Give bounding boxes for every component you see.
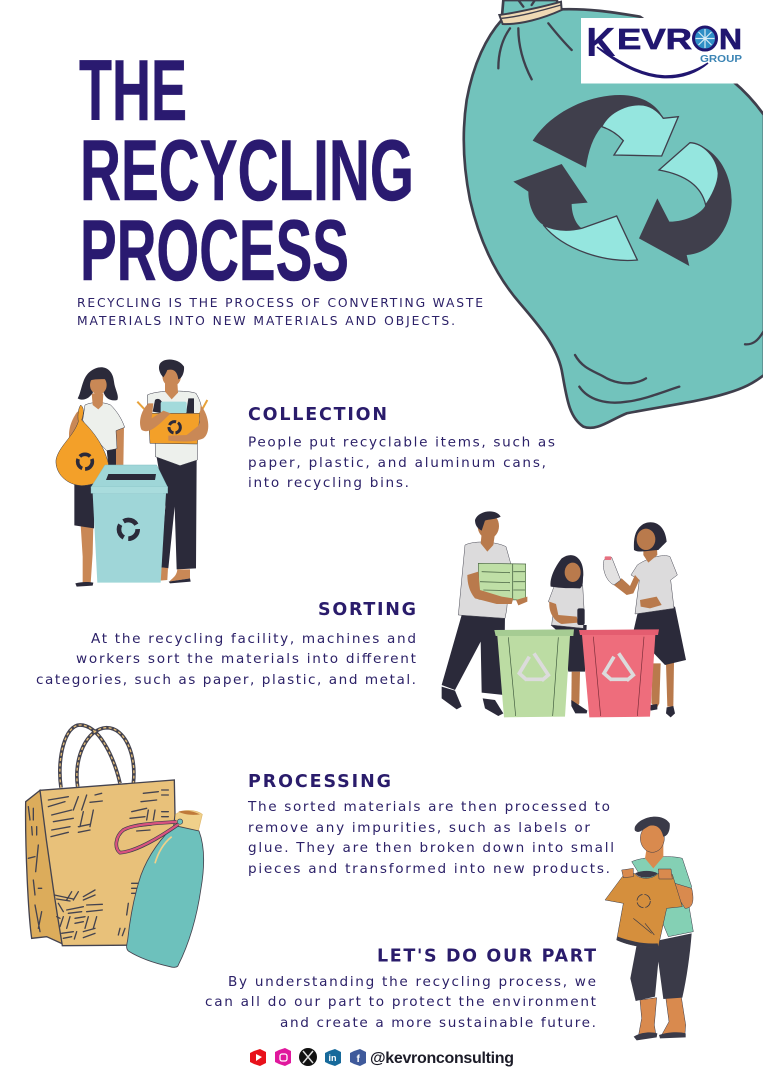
section: collection: COLLECTION [248,405,387,425]
section: sorting: workers sort the materials into different [76,651,416,667]
section: processing [247,772,614,877]
section: let's do our part: can all do our part to protect the environment [205,994,596,1010]
section: collection: into recycling bins. [248,475,409,491]
section: let's do our part: LET'S DO OUR PART [377,946,596,966]
man with paper stack [442,511,527,716]
icon: linkedin [325,1049,341,1066]
section: sorting: At the recycling facility, machines and [91,631,416,647]
recycling bin [91,465,168,583]
logo: Kevron Group [581,18,742,84]
logo: Kevron Group: N [719,24,742,56]
illustration: teal recycling bag [464,0,763,428]
section: collection [248,405,555,491]
woman with bottle [603,522,686,717]
section: let's do our part: and create a more sustainable future. [280,1015,596,1031]
green bin [494,629,574,717]
icon: recycling arrows on bag [513,95,732,266]
section: processing: PROCESSING [248,772,391,792]
subtitle: RECYCLING IS THE PROCESS OF CONVERTING WASTE [77,296,483,310]
orange bag [56,405,108,486]
section: processing: glue. They are then broken down into small [248,840,614,856]
section: processing: remove any impurities, such as labels or [248,820,590,836]
illustration: woven tote bag and water bottle [26,725,204,967]
logo: Kevron Group: K [586,19,616,65]
section: let's do our part [205,946,596,1031]
teal shirt [632,857,693,937]
illustration: person holding recycled t-shirt [605,817,693,1040]
water bottle [116,810,204,967]
section: sorting: SORTING [318,600,416,620]
footer: social icons and handle [250,1048,514,1067]
orange t-shirt [605,873,682,947]
title: THE [79,43,187,139]
woman [69,367,125,587]
section: processing: The sorted materials are then processed to [247,799,610,815]
title [79,43,414,299]
icon: x [299,1048,317,1066]
icon: facebook: f [356,1054,360,1065]
section: collection: paper, plastic, and aluminum cans, [248,455,546,471]
illustration: woman and man with recycling bin [56,359,208,587]
icon: linkedin: in [328,1053,336,1063]
section: sorting: categories, such as paper, plastic, and metal. [36,672,416,688]
section: sorting [36,600,416,688]
handle: @kevronconsulting [370,1050,514,1067]
icon: instagram [275,1048,291,1066]
section: processing: pieces and transformed into new products. [248,861,610,877]
illustration: family sorting recyclables into bins [442,511,686,717]
logo: Kevron Group: GROUP [700,54,742,65]
legs [638,998,657,1037]
icon: youtube [250,1049,266,1066]
title: RECYCLING [80,123,414,219]
subtitle: MATERIALS INTO NEW MATERIALS AND OBJECTS. [77,314,455,328]
section: collection: People put recyclable items, such as [248,434,555,450]
logo: Kevron Group: EVR [617,24,692,56]
logo wheel [694,27,716,50]
tote bag [26,780,175,946]
arms and head [673,883,693,908]
girl [548,555,587,713]
bag handles [60,725,134,788]
man [137,359,208,583]
section: let's do our part: By understanding the recycling process, we [228,974,596,990]
title: PROCESS [80,203,349,299]
subtitle [77,296,483,328]
icon: facebook [350,1049,366,1066]
red bin [579,629,659,717]
